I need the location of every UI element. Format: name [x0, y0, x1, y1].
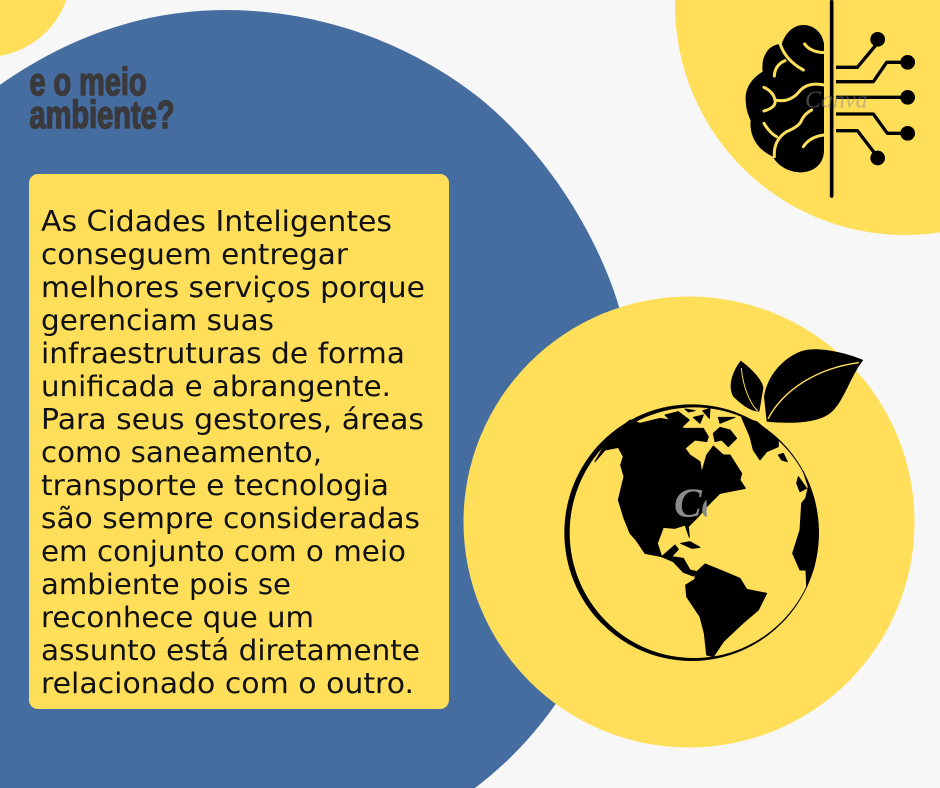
body text: em conjunto com o meio	[41, 535, 406, 568]
body text: relacionado com o outro.	[41, 667, 414, 700]
brain creases	[764, 43, 824, 157]
body text: transporte e tecnologia	[41, 469, 389, 502]
body text: ambiente pois se	[41, 568, 291, 601]
body text: reconhece que um	[41, 601, 314, 634]
small leaf	[731, 361, 763, 412]
heading	[30, 61, 174, 137]
circuit traces	[836, 43, 907, 157]
body text: são sempre consideradas	[41, 502, 420, 535]
continents	[595, 408, 818, 657]
heading: ambiente?	[30, 94, 174, 137]
body text: Para seus gestores, áreas	[41, 403, 424, 436]
card background	[29, 174, 449, 709]
body text: gerenciam suas	[41, 304, 274, 337]
body text: As Cidades Inteligentes	[41, 205, 392, 238]
yellow circle: globe backdrop	[464, 296, 914, 748]
yellow circle: top right	[675, 0, 940, 235]
body text: conseguem entregar	[41, 238, 348, 271]
icon: globe with leaves	[564, 349, 863, 661]
central vertical line	[826, 2, 837, 196]
leaf veins	[741, 363, 858, 418]
brain silhouette	[746, 25, 824, 172]
body text: unificada e abrangente.	[41, 370, 391, 403]
body text	[41, 205, 425, 700]
body text: como saneamento,	[41, 436, 322, 469]
circuit nodes	[870, 32, 915, 165]
body text: melhores serviços porque	[41, 271, 425, 304]
globe ring	[564, 404, 819, 661]
blue background blob	[0, 10, 634, 788]
watermark: Ca	[674, 481, 723, 527]
body text: assunto está diretamente	[41, 634, 420, 667]
big leaf	[764, 349, 863, 423]
panel: text card	[29, 174, 449, 709]
yellow circle: top left corner	[0, 0, 71, 57]
heading: e o meio	[30, 61, 146, 104]
body text: infraestruturas de forma	[41, 337, 405, 370]
watermark: Canva	[805, 87, 868, 113]
icon: brain and circuit	[746, 2, 915, 196]
